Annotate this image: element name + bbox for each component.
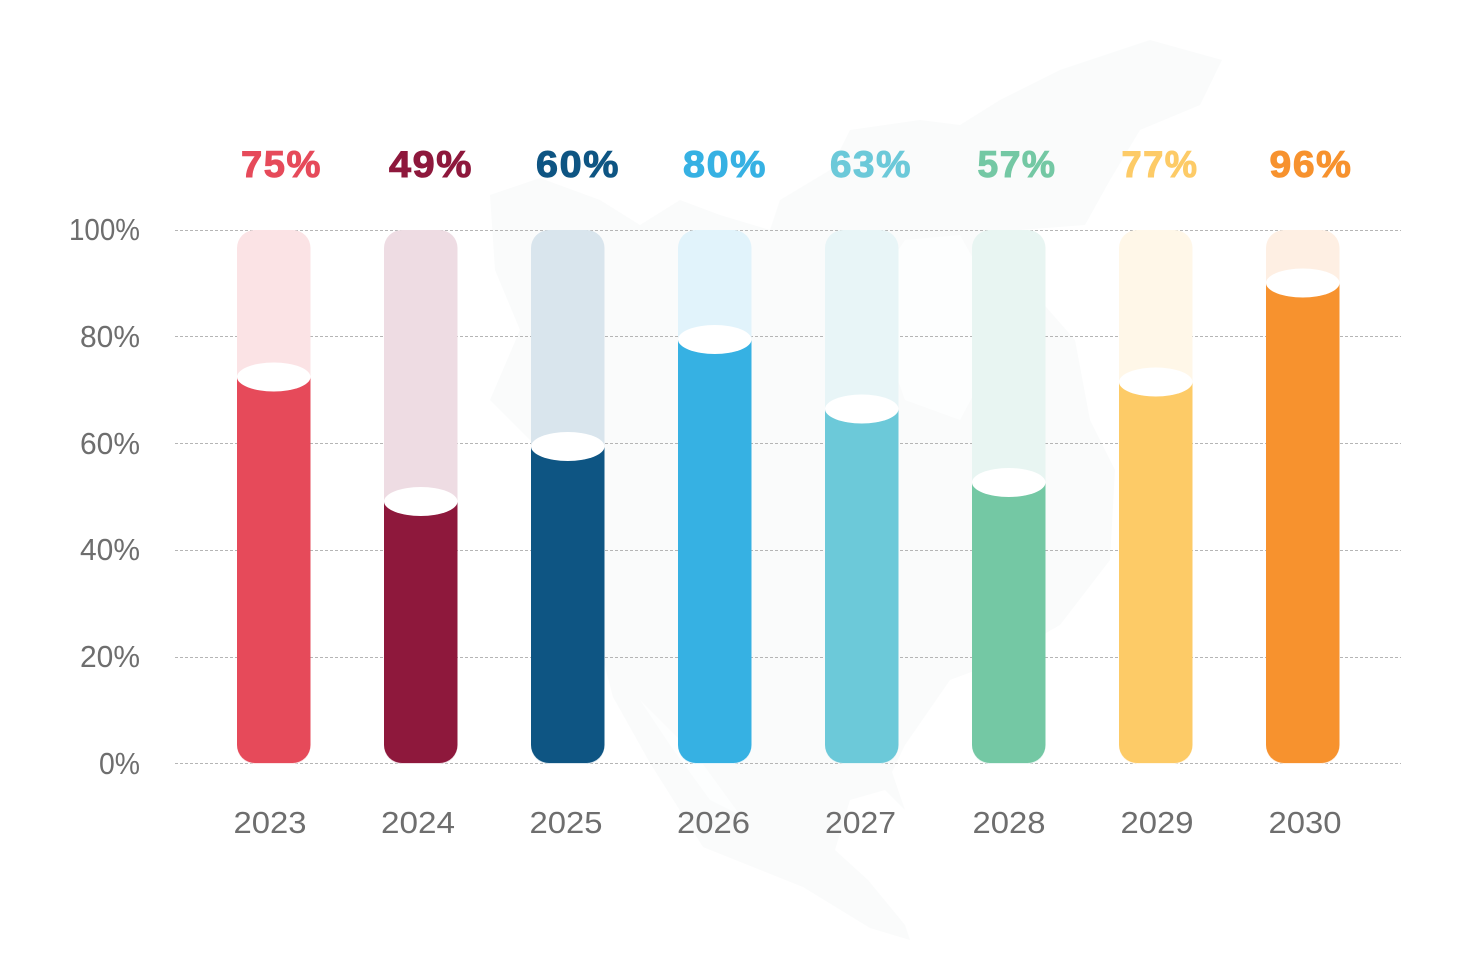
gridlines <box>175 230 1401 764</box>
percentage labels: 75% <box>241 144 322 185</box>
percentage labels: 96% <box>1270 144 1352 185</box>
y axis labels: 20% <box>80 639 140 674</box>
y axis labels: 80% <box>80 319 140 354</box>
percentage labels: 63% <box>830 144 912 185</box>
bar 2027 <box>825 230 898 764</box>
year labels: 2025 <box>530 805 602 840</box>
percentage labels: 77% <box>1122 144 1198 185</box>
bar 2026 <box>678 230 752 764</box>
percentage labels: 57% <box>978 144 1056 185</box>
bar 2023 <box>237 230 310 764</box>
y axis labels <box>69 212 140 781</box>
year labels: 2023 <box>234 805 306 840</box>
y axis labels: 0% <box>99 746 140 781</box>
year labels <box>234 805 1342 840</box>
background map silhouette <box>490 40 1222 940</box>
year labels: 2027 <box>825 805 896 840</box>
percentage labels: 49% <box>389 144 473 185</box>
bar 2030 <box>1266 230 1340 764</box>
year labels: 2026 <box>677 805 750 840</box>
year labels: 2028 <box>972 805 1046 840</box>
bar 2025 <box>531 230 604 764</box>
bar 2028 <box>972 230 1046 764</box>
percentage labels: 80% <box>683 144 767 185</box>
y axis labels: 60% <box>80 426 140 461</box>
bar 2024 <box>384 230 458 764</box>
percentage labels <box>241 144 1352 185</box>
map bays <box>640 235 1000 815</box>
year labels: 2030 <box>1268 805 1342 840</box>
y axis labels: 40% <box>80 532 140 567</box>
bar 2029 <box>1119 230 1192 764</box>
year labels: 2029 <box>1120 805 1194 840</box>
year labels: 2024 <box>381 805 455 840</box>
y axis labels: 100% <box>69 212 140 247</box>
percentage labels: 60% <box>536 144 620 185</box>
